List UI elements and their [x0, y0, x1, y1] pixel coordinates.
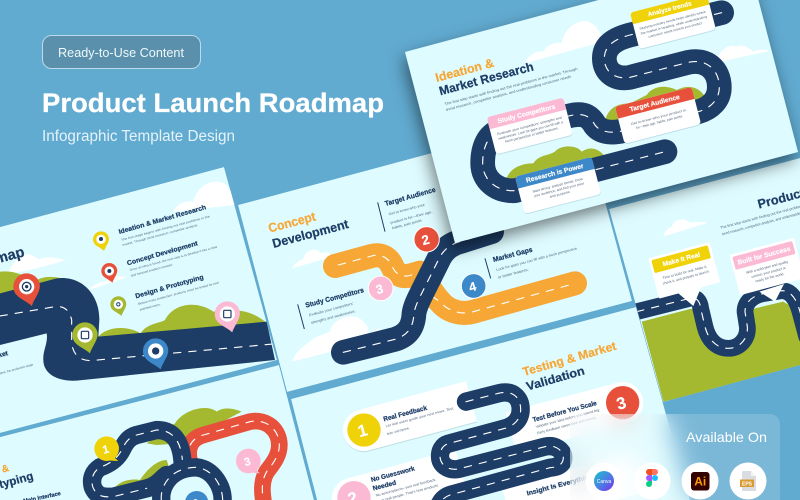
text block: study competitors [298, 287, 365, 329]
text block: stages: and focused product concept. [130, 263, 173, 278]
card: built for success: Built for Success [737, 246, 792, 267]
text block: target audience: Get to know who your [388, 203, 426, 216]
pin: blue palette [143, 338, 168, 370]
card: built for success: ready for the world. [755, 272, 785, 283]
text block: study competitors: Study Competitors [305, 287, 365, 310]
pill: test before you scale: Test Before You Scale [532, 400, 598, 424]
pill: test before you scale: Validate your idea before you spend big. [535, 408, 601, 429]
pill: insight: Insight Is Everything [526, 473, 594, 498]
pin: small green [110, 296, 126, 316]
card: study competitors [487, 98, 573, 155]
pill: real feedback [338, 381, 477, 457]
card: target audience [615, 87, 701, 145]
pill: real feedback: Let real users guide your next move. Test, [385, 406, 455, 428]
text block: stages: Before mass production, products must be tested by real [138, 280, 219, 306]
icon: illustrator [682, 462, 718, 500]
pill: real feedback: learn, and improve. [387, 426, 410, 436]
marker 2: 2 [420, 232, 431, 248]
heading: Design and Prototyping [0, 464, 34, 490]
card: research is power: your audience, and find your pivot [533, 181, 585, 198]
card: study competitors: Evaluate your competitors' strengths and [497, 116, 562, 136]
panel: design and prototyping slide [0, 365, 314, 500]
pill: insight [502, 451, 646, 500]
card: analyze trends: Studying industry trends helps identify where [639, 10, 706, 31]
panel: ideation and market research slide [405, 0, 798, 243]
panel: product launch slide [609, 158, 800, 402]
green hills [113, 408, 242, 493]
card: built for success: With a solid plan and quality [746, 260, 789, 275]
card: study competitors: Study Competitors [497, 104, 557, 125]
card: target audience: Get to know who your product is [630, 108, 687, 126]
green ground [642, 302, 800, 402]
marker 4 [461, 274, 486, 298]
heading: concept development: Development [271, 217, 351, 251]
pin: small yellow [93, 231, 109, 251]
card: built for success: control, your product is [751, 266, 786, 279]
text block: market gaps: Look for gaps you can fill with a fresh perspective [496, 247, 577, 272]
navy road [343, 232, 492, 352]
icon: eps file [730, 462, 766, 500]
road [483, 13, 722, 191]
text block: target audience [378, 187, 437, 232]
road [637, 291, 800, 348]
pill: no guesswork: Needed [372, 480, 397, 493]
title: Product Launch Roadmap [42, 88, 384, 118]
card: target audience: Target Audience [629, 94, 681, 114]
card: research is power: and purpose. [549, 190, 571, 199]
pill: test before you scale: 3 [614, 393, 628, 414]
card: analyze trends: the market is heading, while understanding [640, 15, 708, 36]
text block: target audience: Target Audience [384, 187, 437, 208]
text block: target audience: habits, pain points. [392, 218, 423, 230]
card: analyze trends: Analyze trends [647, 0, 693, 18]
text block: stages: market. Through trend research, competitor analysis. [122, 223, 199, 247]
marker 3 [236, 449, 261, 473]
panel: testing and market validation slide [291, 307, 690, 500]
marker 4: 4 [467, 279, 478, 295]
road [438, 392, 563, 500]
navy road [92, 430, 223, 500]
cloud [663, 219, 708, 237]
pin: pink note [214, 301, 240, 332]
card: analyze trends: customers' needs ensures your product [648, 21, 702, 39]
pin: red target [13, 273, 40, 306]
pill: test before you scale [506, 382, 644, 445]
card: analyze trends [630, 0, 716, 50]
marker 2 [414, 227, 439, 252]
text block: stages: Ideation & Market Research [118, 204, 207, 236]
text block: ideation intro: trend research, competitor analysis, and understanding consumer needs [446, 75, 572, 112]
text block: study competitors: Evaluate your competitors' [309, 302, 354, 317]
pill: no guesswork [327, 450, 466, 500]
green hills [0, 271, 267, 343]
panel: concept development slide [238, 153, 632, 392]
heading: ideation and market research: Market Research [437, 60, 535, 98]
heading: testing and validation: Validation [525, 364, 586, 394]
icon: figma [634, 462, 670, 500]
card: make it real [648, 242, 720, 306]
subtitle: Infographic Template Design [42, 128, 235, 145]
text block: stages: Concept Development [126, 240, 199, 267]
badge: ready-to-use content [42, 36, 200, 68]
text block: market gaps: Market Gaps [492, 247, 534, 264]
text block: study competitors: strengths and weaknesses. [311, 309, 356, 325]
icon: canva: Canva [597, 479, 611, 485]
pill: test before you scale: Early feedback saves time and money. [537, 415, 597, 435]
marker 3 [368, 276, 393, 301]
clouds [525, 21, 770, 63]
heading: ideation and market research: Ideation & [434, 56, 495, 85]
clouds [8, 182, 235, 290]
marker 1: 1 [101, 443, 110, 457]
text block: stages: potential users. [139, 302, 161, 312]
pill: real feedback: Real Feedback [383, 405, 428, 423]
card: study competitors: fresh perspective or better features. [505, 126, 559, 144]
icon: eps file: EPS [742, 482, 753, 488]
card: make it real: Make It Real [662, 252, 701, 268]
road [0, 278, 275, 381]
clouds [292, 250, 383, 362]
pin: green checklist [72, 322, 98, 354]
pin: small red [101, 263, 118, 283]
text block: market gaps: or better features. [498, 268, 529, 280]
pill: no guesswork: No Guesswork [370, 465, 416, 484]
red road [189, 421, 279, 500]
text block: stages: The first stage begins with finding out real problems in the [121, 214, 211, 242]
card: research is power: Start strong: analyze trends, know [532, 177, 584, 194]
text block: stages [0, 204, 219, 377]
card: study competitors: weaknesses. Look for gaps you can fill with a [498, 120, 564, 141]
card: make it real: Time to build for real. Make it, [662, 264, 708, 280]
marker 1 [94, 436, 119, 461]
text block: stages: Once an idea is found, the next step is to develop it into a clear [129, 245, 218, 272]
card: built for success [729, 238, 800, 302]
card: make it real: check it, and prepare to launch. [662, 269, 710, 286]
pill: no guesswork: No assumptions—just real feedback [375, 478, 436, 498]
text block: target audience: product is for—their age, [390, 210, 433, 225]
heading: available on: Available On [686, 429, 767, 445]
icon: canva [586, 462, 622, 500]
badge: ready-to-use content: Ready-to-Use Content [58, 45, 184, 60]
icon: illustrator: Ai [694, 474, 706, 488]
pill: real feedback: 1 [356, 420, 370, 441]
marker 3: 3 [243, 456, 252, 469]
heading: concept development: Concept [267, 209, 318, 236]
marker 2 [185, 491, 208, 500]
text block: stages: Design & Prototyping [135, 274, 204, 300]
orange road [335, 255, 575, 313]
heading: Design and Prototyping: & [1, 463, 10, 476]
card: research is power: Research is Power [525, 163, 585, 185]
green bushes [506, 87, 705, 187]
heading: testing and validation: Testing & Market [521, 339, 618, 379]
panel: available on [570, 414, 780, 500]
marker 3: 3 [374, 282, 385, 297]
text block: ideation intro: The first step starts with finding out the real problems in the market. Through [444, 67, 578, 106]
text block: market gaps [485, 247, 577, 280]
panel: roadmap overview slide [0, 167, 277, 433]
card: research is power [515, 157, 601, 215]
card: target audience: for—their age, habits, pain points. [636, 114, 684, 130]
